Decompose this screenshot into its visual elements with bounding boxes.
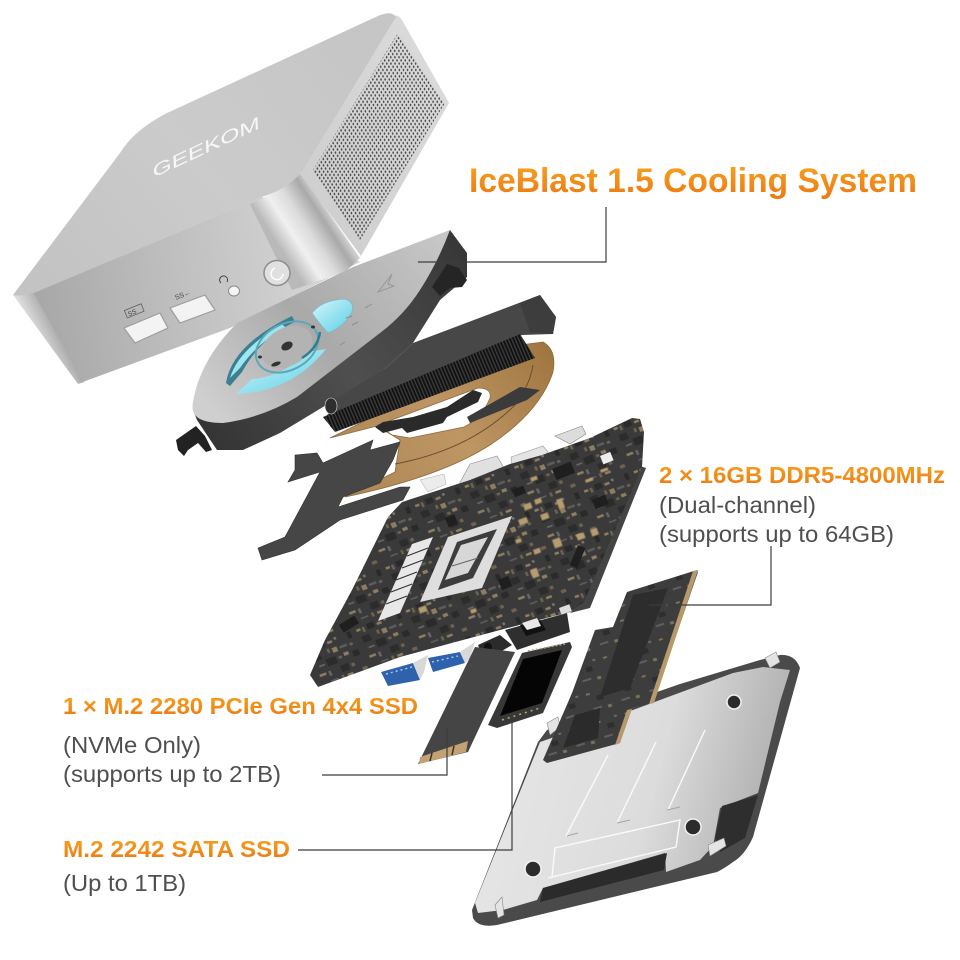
enclosure right vented side — [300, 16, 449, 256]
copper pipe highlight — [395, 365, 533, 464]
fan plate markings — [340, 304, 372, 345]
leader line: M.2 2280 SSD — [322, 728, 447, 775]
bottom crescent — [236, 349, 326, 394]
GEEKOM logo: GEEKOM — [152, 112, 260, 182]
leader line: DDR5 memory — [649, 546, 771, 605]
CPU socket — [438, 529, 497, 590]
rear I/O ports — [420, 426, 586, 492]
USB label left: SS — [127, 308, 138, 318]
USB-A port — [457, 456, 504, 491]
M.2 2242 heading: M.2 2242 SATA SSD — [63, 836, 290, 862]
power button — [264, 260, 290, 286]
micro port — [555, 426, 586, 444]
CPU frame — [420, 516, 512, 602]
headphone jack — [220, 276, 240, 296]
RAM modules — [543, 570, 698, 763]
M.2 2280 spec text — [63, 693, 418, 787]
mini PC enclosure — [13, 13, 449, 384]
tray lower window — [540, 853, 667, 902]
heatsink bracket — [467, 387, 540, 423]
tray dark frame — [472, 655, 800, 926]
vent grille — [313, 33, 445, 240]
RAM lower gold contacts — [615, 709, 632, 745]
front small port — [420, 474, 446, 492]
dark chips — [339, 462, 609, 633]
tray silver plate — [475, 667, 790, 913]
fan plate arrow — [378, 274, 394, 292]
M.2 2242 SSD — [488, 642, 572, 728]
motherboard — [310, 418, 646, 687]
PCB surface — [310, 418, 644, 687]
M.2 2280 heading: 1 × M.2 2280 PCIe Gen 4x4 SSD — [63, 693, 418, 719]
heatsink clip — [375, 390, 482, 433]
RAM board — [543, 570, 698, 763]
memory contact strip — [378, 537, 433, 621]
leader line: M.2 2242 SSD — [298, 718, 512, 850]
fan lug left — [176, 426, 212, 456]
heatsink — [323, 295, 556, 433]
M.2 2280 detail line 1: (NVMe Only) — [63, 732, 201, 758]
M.2 2242 spec text — [63, 836, 290, 896]
fan dark side wall — [193, 230, 467, 450]
fan top plate — [192, 230, 450, 423]
fan lug right — [432, 264, 467, 296]
SSD label — [500, 650, 562, 716]
tray right window — [715, 795, 758, 852]
fan hub — [254, 318, 320, 376]
tray screw holes — [525, 695, 741, 877]
enclosure front face — [33, 197, 360, 383]
USB 3 ports blue — [381, 642, 475, 686]
USB port right — [170, 295, 215, 323]
tray raised panel lines — [548, 730, 705, 878]
copper heat pipe — [330, 342, 554, 497]
solder pads upper right — [418, 467, 609, 614]
USB label right: SS← — [174, 289, 192, 302]
SSD contacts — [419, 741, 468, 764]
USB label left — [124, 304, 144, 319]
enclosure top face — [13, 13, 396, 296]
bottom cover tray — [472, 652, 800, 926]
enclosure left lip — [13, 292, 84, 384]
USB port left — [124, 313, 168, 343]
CPU die — [445, 537, 488, 580]
RAM upper gold contacts — [649, 570, 698, 704]
rotor ring — [247, 311, 327, 383]
M.2 2242 detail: (Up to 1TB) — [63, 870, 186, 896]
cooling fan assembly — [176, 230, 467, 456]
small white chip — [600, 452, 614, 464]
CPU heat spreader — [420, 516, 512, 602]
audio jack and front connector — [478, 604, 572, 655]
motherboard bracket — [258, 440, 410, 560]
M.2 2280 detail line 2: (supports up to 2TB) — [63, 761, 281, 787]
heading: IceBlast cooling system: IceBlast 1.5 Cooling System — [469, 162, 917, 200]
RAM upper chip — [600, 588, 668, 697]
RAM lower chip — [563, 708, 600, 748]
heatsink upper body — [326, 295, 556, 418]
memory spec text — [659, 462, 945, 547]
memory detail line 1: (Dual-channel) — [659, 492, 816, 518]
fan blower window — [312, 299, 353, 333]
memory heading: 2 × 16GB DDR5-4800MHz — [659, 462, 945, 488]
left crescent — [226, 316, 295, 386]
tray tabs — [495, 652, 780, 918]
HDMI port — [511, 446, 548, 472]
fan screw — [325, 398, 337, 414]
fan rotor opening — [226, 311, 327, 394]
memory detail line 2: (supports up to 64GB) — [659, 521, 894, 547]
board side edge — [570, 466, 646, 613]
M.2 2280 SSD — [418, 647, 515, 764]
enclosure corner column — [250, 172, 360, 290]
leader line: cooling system — [418, 207, 606, 262]
heatsink fins — [323, 334, 535, 432]
